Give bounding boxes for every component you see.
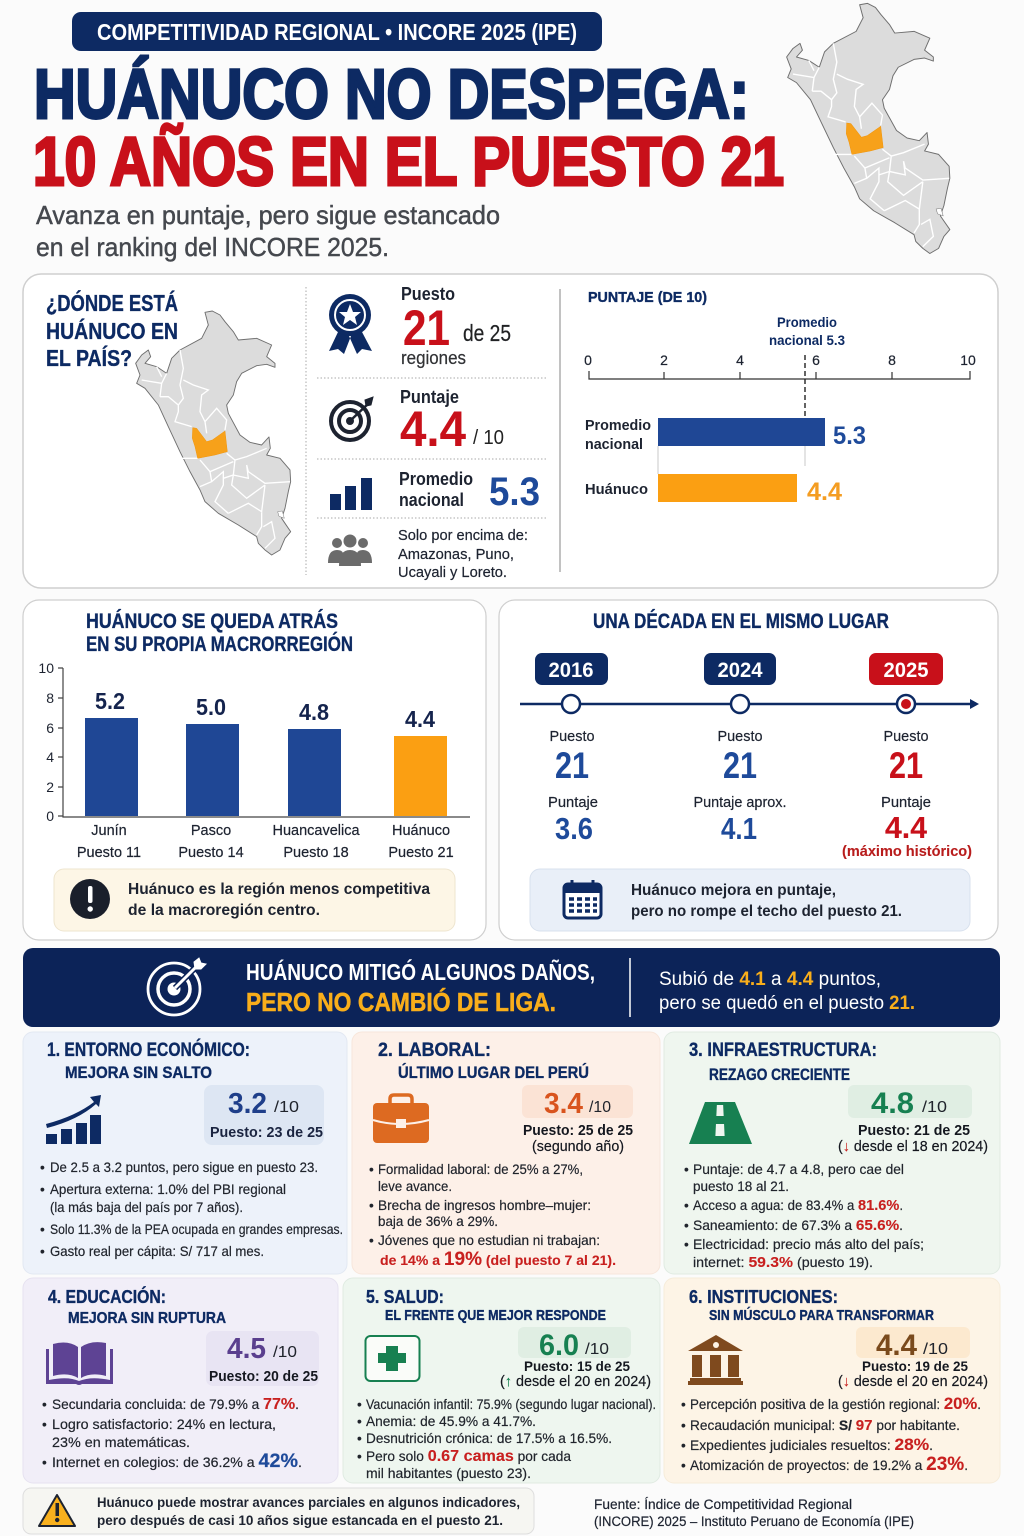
bullets: •: [369, 1198, 374, 1213]
column: 2024: [694, 728, 786, 846]
note: solo por encima de: [398, 527, 528, 581]
bullets: •: [681, 1397, 686, 1412]
stat: puntaje 4.4: 4.4: [400, 401, 466, 457]
timeline: [520, 653, 979, 713]
chart: puntaje de 10: 5.3: [833, 422, 866, 450]
card 1 heading: [47, 1039, 250, 1082]
column: 2025: Puntaje: [881, 794, 931, 811]
bullets: mil habitantes (puesto 23).: [366, 1466, 531, 1481]
stat: puntaje 4.4: Puntaje: [400, 387, 459, 407]
chart: puntaje de 10: 10: [960, 352, 976, 368]
panel: timeline decade: [499, 600, 998, 940]
column: 2024: Puntaje aprox.: [694, 794, 786, 811]
bar chart: macroregion scores: 2: [46, 779, 54, 795]
stat: promedio nacional 5.3: 5.3: [489, 470, 540, 514]
bar chart: macroregion scores: Puesto 11: [77, 845, 141, 861]
bullets: •: [40, 1182, 45, 1197]
bullets: Acceso a agua: de 83.4% a 81.6%.: [693, 1197, 903, 1214]
banner detail: pero se quedó en el puesto 21.: [659, 993, 915, 1014]
score 4.8: Puesto: 21 de 25: [858, 1123, 970, 1139]
callout: least competitive: [54, 869, 455, 931]
bullets: Jóvenes que no estudian ni trabajan:: [378, 1233, 600, 1248]
stat: puesto 21: 21: [403, 300, 450, 356]
bullets: Anemia: de 45.9% a 41.7%.: [366, 1414, 536, 1429]
card 2 heading: ÚLTIMO LUGAR DEL PERÚ: [398, 1063, 589, 1082]
column: 2016: 21: [555, 745, 589, 786]
score 4.8: 4.8: [871, 1087, 914, 1120]
bar chart: macroregion scores: 4.8: [299, 699, 329, 725]
source: (INCORE) 2025 – Instituto Peruano de Economía (IPE): [594, 1514, 914, 1529]
bar chart: macroregion scores: Puesto 14: [178, 845, 244, 861]
column: 2016: Puntaje: [548, 794, 598, 811]
icon: people: [328, 534, 372, 566]
card 6 heading: 6. INSTITUCIONES:: [689, 1287, 838, 1307]
score 4.5: [206, 1331, 319, 1386]
stat: promedio nacional 5.3: nacional: [399, 490, 464, 510]
bullets: [42, 1396, 302, 1472]
icon: target white: [148, 958, 206, 1015]
score 6.0: [500, 1327, 651, 1390]
bullets: •: [681, 1418, 686, 1433]
subtitle: [36, 200, 500, 262]
heading: where is Huánuco: EL PAÍS?: [46, 344, 132, 371]
score 3.2: [204, 1085, 324, 1145]
subtitle: en el ranking del INCORE 2025.: [36, 232, 389, 262]
card 4: educación: [23, 1278, 338, 1483]
bullets: Desnutrición crónica: de 17.5% a 16.5%.: [366, 1431, 612, 1446]
bullets: •: [42, 1455, 47, 1470]
score 4.8: (↓ desde el 18 en 2024): [838, 1139, 988, 1155]
chart: puntaje de 10: 8: [888, 352, 896, 368]
bar chart: macroregion scores: Huánuco: [392, 823, 450, 839]
bar chart: macroregion scores: 8: [46, 690, 54, 706]
callout: least competitive: de la macroregión centro.: [128, 902, 320, 919]
card 6 heading: [689, 1287, 934, 1324]
title: [33, 55, 784, 200]
score 4.5: /10: [273, 1344, 297, 1361]
bullets: baja de 36% a 29%.: [378, 1214, 498, 1229]
card 4 heading: MEJORA SIN RUPTURA: [68, 1310, 226, 1327]
panel: location and key figures: [23, 274, 998, 588]
title: 10 AÑOS EN EL PUESTO 21: [33, 123, 784, 200]
bullets: puesto 18 al 21.: [693, 1179, 789, 1194]
stat: puesto 21: Puesto: [401, 284, 455, 304]
subtitle: Avanza en puntaje, pero sigue estancado: [36, 200, 500, 230]
score 4.4: (↓ desde el 20 en 2024): [838, 1374, 988, 1390]
card 1 heading: 1. ENTORNO ECONÓMICO:: [47, 1039, 250, 1061]
bullets: Vacunación infantil: 75.9% (segundo lugar nacional).: [366, 1397, 656, 1412]
bullets: •: [40, 1244, 45, 1259]
timeline: 2025: [884, 659, 929, 682]
warning note: Huánuco puede mostrar avances parciales en algunos indicadores,: [97, 1494, 520, 1510]
bar chart: macroregion scores: 5.0: [196, 694, 226, 720]
chart: puntaje de 10: [584, 289, 976, 506]
stat: puesto 21: regiones: [401, 348, 466, 368]
bullets: Gasto real per cápita: S/ 717 al mes.: [50, 1244, 264, 1259]
heading: where is Huánuco: ¿DÓNDE ESTÁ: [46, 289, 178, 316]
bullets: •: [684, 1198, 689, 1213]
score 4.5: Puesto: 20 de 25: [209, 1369, 318, 1385]
chart: puntaje de 10: Promedio: [585, 417, 651, 434]
bullets: •: [681, 1438, 686, 1453]
chart: puntaje de 10: 4.4: [807, 478, 842, 506]
heading: where is Huánuco: HUÁNUCO EN: [46, 317, 178, 344]
banner heading: HUÁNUCO MITIGÓ ALGUNOS DAÑOS,: [246, 958, 595, 985]
icon: rosette: [329, 294, 372, 354]
stat: puesto 21: de 25: [463, 320, 511, 346]
column: 2025: [842, 728, 972, 860]
bar chart: macroregion scores: 0: [46, 808, 54, 824]
bullets: •: [40, 1160, 45, 1175]
bar chart: macroregion scores: 10: [38, 660, 54, 676]
bullets: leve avance.: [378, 1179, 452, 1194]
bullets: •: [357, 1414, 362, 1429]
banner detail: [659, 969, 915, 1014]
bar chart: macroregion scores: 4: [46, 749, 54, 765]
banner heading: [246, 958, 595, 1017]
note: solo por encima de: Solo por encima de:: [398, 527, 528, 544]
score 4.4: [838, 1327, 988, 1390]
warning note: [23, 1488, 534, 1534]
header tag pill: [72, 12, 602, 51]
bullets: Atomización de proyectos: de 19.2% a 23%.: [690, 1454, 968, 1475]
icon: growth chart: [46, 1095, 101, 1144]
bar chart: macroregion scores: Junín: [91, 823, 127, 839]
stat: promedio nacional 5.3: Promedio: [399, 469, 473, 489]
bullets: Electricidad: precio más alto del país;: [693, 1237, 924, 1252]
bullets: Logro satisfactorio: 24% en lectura,: [52, 1417, 276, 1432]
icon: bars: [330, 478, 372, 510]
bullets: Secundaria concluida: de 79.9% a 77%.: [52, 1396, 299, 1413]
chart: puntaje de 10: nacional: [585, 436, 643, 453]
score 6.0: /10: [585, 1341, 609, 1358]
card 5 heading: 5. SALUD:: [366, 1287, 444, 1307]
warning note: pero después de casi 10 años sigue estancada en el puesto 21.: [97, 1512, 503, 1528]
column: 2025: 21: [889, 745, 923, 786]
callout: ceiling: [530, 869, 970, 931]
bar chart: macroregion scores: Huancavelica: [272, 823, 360, 839]
heading: where is Huánuco: [46, 289, 178, 371]
column: 2025: Puesto: [884, 728, 928, 745]
heading: macroregion: EN SU PROPIA MACRORREGIÓN: [86, 632, 353, 656]
card 3: infraestructura: [664, 1032, 1000, 1274]
score 4.4: 4.4: [876, 1329, 917, 1362]
card 4 heading: [48, 1286, 226, 1327]
chart: puntaje de 10: 2: [660, 352, 668, 368]
bullets: •: [684, 1162, 689, 1177]
score 4.4: Puesto: 19 de 25: [862, 1358, 968, 1374]
timeline: 2016: [548, 659, 594, 682]
card 3 heading: REZAGO CRECIENTE: [709, 1065, 850, 1084]
heading: decade: UNA DÉCADA EN EL MISMO LUGAR: [593, 610, 889, 633]
callout: least competitive: Huánuco es la región menos competitiva: [128, 881, 430, 898]
score 3.2: 3.2: [228, 1088, 267, 1120]
column: 2024: 21: [723, 745, 757, 786]
note: solo por encima de: Ucayali y Loreto.: [398, 564, 507, 581]
bar chart: macroregion scores: [38, 660, 470, 861]
chart: puntaje de 10: nacional 5.3: [769, 332, 845, 348]
icon: briefcase: [373, 1095, 429, 1143]
bullets: Formalidad laboral: de 25% a 27%,: [378, 1162, 583, 1177]
icon: book: [46, 1342, 113, 1385]
map: Peru with Huánuco highlighted: [136, 311, 291, 555]
icon: institution building: [688, 1335, 743, 1385]
score 6.0: 6.0: [539, 1329, 579, 1362]
bullets: [684, 1162, 924, 1271]
bullets: •: [357, 1449, 362, 1464]
score 3.4: 3.4: [544, 1088, 583, 1120]
column: 2025: 4.4: [885, 810, 928, 845]
card 3 heading: [689, 1040, 877, 1084]
score 3.4: [522, 1085, 633, 1155]
bullets: •: [369, 1233, 374, 1248]
card 2 heading: [378, 1040, 589, 1082]
bullets: •: [42, 1417, 47, 1432]
timeline: 2024: [718, 659, 763, 682]
bullets: •: [684, 1237, 689, 1252]
icon: target: [331, 397, 373, 440]
bullets: De 2.5 a 3.2 puntos, pero sigue en puesto 23.: [50, 1160, 318, 1175]
bullets: Brecha de ingresos hombre–mujer:: [378, 1198, 591, 1213]
bullets: Saneamiento: de 67.3% a 65.6%.: [693, 1217, 903, 1234]
chart: puntaje de 10: Huánuco: [585, 481, 648, 498]
stat: puntaje 4.4: [400, 387, 504, 457]
score 4.8: /10: [922, 1099, 947, 1116]
source: [594, 1497, 914, 1529]
bullets: Internet en colegios: de 36.2% a 42%.: [52, 1451, 302, 1472]
score 6.0: (↑ desde el 20 en 2024): [500, 1374, 651, 1390]
card 2: laboral: [352, 1032, 660, 1274]
score 3.2: Puesto: 23 de 25: [210, 1125, 323, 1141]
chart: puntaje de 10: Promedio: [777, 314, 837, 330]
bar chart: macroregion scores: 5.2: [95, 688, 125, 714]
banner detail: Subió de 4.1 a 4.4 puntos,: [659, 969, 881, 990]
card 6: instituciones: [664, 1278, 1000, 1483]
chart: puntaje de 10: 4: [736, 352, 744, 368]
bar chart: macroregion scores: Puesto 18: [283, 845, 349, 861]
bullets: •: [42, 1397, 47, 1412]
bar chart: macroregion scores: Puesto 21: [388, 845, 454, 861]
bullets: Pero solo 0.67 camas por cada: [366, 1448, 571, 1465]
score 6.0: Puesto: 15 de 25: [524, 1358, 630, 1374]
card 5 heading: EL FRENTE QUE MEJOR RESPONDE: [385, 1308, 606, 1324]
chart: puntaje de 10: 6: [812, 352, 820, 368]
card 4 heading: 4. EDUCACIÓN:: [48, 1286, 166, 1307]
bullets: •: [40, 1222, 45, 1237]
panel: macroregion comparison: [23, 600, 486, 940]
score 3.4: /10: [589, 1099, 611, 1116]
map: Peru header: [787, 3, 950, 253]
score 4.4: /10: [923, 1341, 948, 1358]
bullets: •: [684, 1218, 689, 1233]
bar chart: macroregion scores: 4.4: [405, 706, 435, 732]
bullets: Recaudación municipal: S/ 97 por habitante.: [690, 1417, 960, 1434]
score 3.2: /10: [274, 1099, 299, 1116]
stat: puesto 21: [401, 284, 511, 368]
bullets: 23% en matemáticas.: [52, 1435, 190, 1450]
column: 2024: 4.1: [721, 811, 757, 846]
chart: puntaje de 10: 0: [584, 352, 592, 368]
score 3.4: Puesto: 25 de 25: [523, 1123, 633, 1139]
score 4.5: 4.5: [227, 1333, 266, 1365]
bullets: Expedientes judiciales resueltos: 28%.: [690, 1435, 933, 1454]
bullets: Apertura externa: 1.0% del PBI regional: [50, 1182, 286, 1197]
bullets: [681, 1394, 981, 1475]
heading: macroregion: HUÁNUCO SE QUEDA ATRÁS: [86, 610, 338, 633]
bullets: •: [357, 1397, 362, 1412]
callout: ceiling: Huánuco mejora en puntaje,: [631, 882, 836, 899]
bullets: [369, 1162, 616, 1270]
banner heading: PERO NO CAMBIÓ DE LIGA.: [246, 987, 556, 1017]
bullets: Puntaje: de 4.7 a 4.8, pero cae del: [693, 1162, 904, 1177]
score 3.4: (segundo año): [532, 1139, 624, 1155]
column: 2016: Puesto: [550, 728, 594, 745]
bullets: •: [681, 1458, 686, 1473]
bullets: Solo 11.3% de la PEA ocupada en grandes empresas.: [50, 1222, 343, 1237]
stat: puntaje 4.4: / 10: [473, 427, 504, 449]
bullets: [40, 1160, 343, 1259]
bullets: Percepción positiva de la gestión regional: 20%.: [690, 1394, 981, 1413]
card 2 heading: 2. LABORAL:: [378, 1040, 491, 1061]
heading: macroregion: [86, 610, 353, 656]
column: 2025: (máximo histórico): [842, 843, 972, 860]
bullets: internet: 59.3% (puesto 19).: [693, 1254, 873, 1271]
card 1 heading: MEJORA SIN SALTO: [65, 1063, 212, 1082]
icon: road: [689, 1102, 752, 1144]
bullets: (la más baja del país por 7 años).: [50, 1200, 243, 1215]
stat: promedio nacional 5.3: [399, 469, 540, 514]
source: Fuente: Índice de Competitividad Regional: [594, 1497, 852, 1512]
note: solo por encima de: Amazonas, Puno,: [398, 546, 514, 563]
card 5: salud: [343, 1278, 660, 1483]
bullets: •: [369, 1162, 374, 1177]
bullets: •: [357, 1431, 362, 1446]
score 4.8: [838, 1085, 988, 1155]
header tag pill: COMPETITIVIDAD REGIONAL • INCORE 2025 (IPE): [97, 19, 577, 45]
column: 2016: [548, 728, 598, 846]
bullets: [357, 1397, 656, 1481]
bar chart: macroregion scores: 6: [46, 720, 54, 736]
card 5 heading: [366, 1287, 606, 1324]
banner: no cambió de liga: [23, 948, 1000, 1027]
chart: puntaje de 10: PUNTAJE (DE 10): [588, 289, 707, 306]
bar chart: macroregion scores: Pasco: [191, 823, 231, 839]
bullets: de 14% a 19% (del puesto 7 al 21).: [380, 1249, 616, 1270]
callout: ceiling: pero no rompe el techo del puesto 21.: [631, 903, 902, 920]
title: HUÁNUCO NO DESPEGA:: [34, 55, 749, 133]
icon: medical cross: [366, 1336, 420, 1381]
card 3 heading: 3. INFRAESTRUCTURA:: [689, 1040, 877, 1061]
column: 2024: Puesto: [718, 728, 762, 745]
card 6 heading: SIN MÚSCULO PARA TRANSFORMAR: [709, 1306, 934, 1324]
column: 2016: 3.6: [555, 811, 593, 846]
card 1: entorno económico: [23, 1032, 347, 1274]
